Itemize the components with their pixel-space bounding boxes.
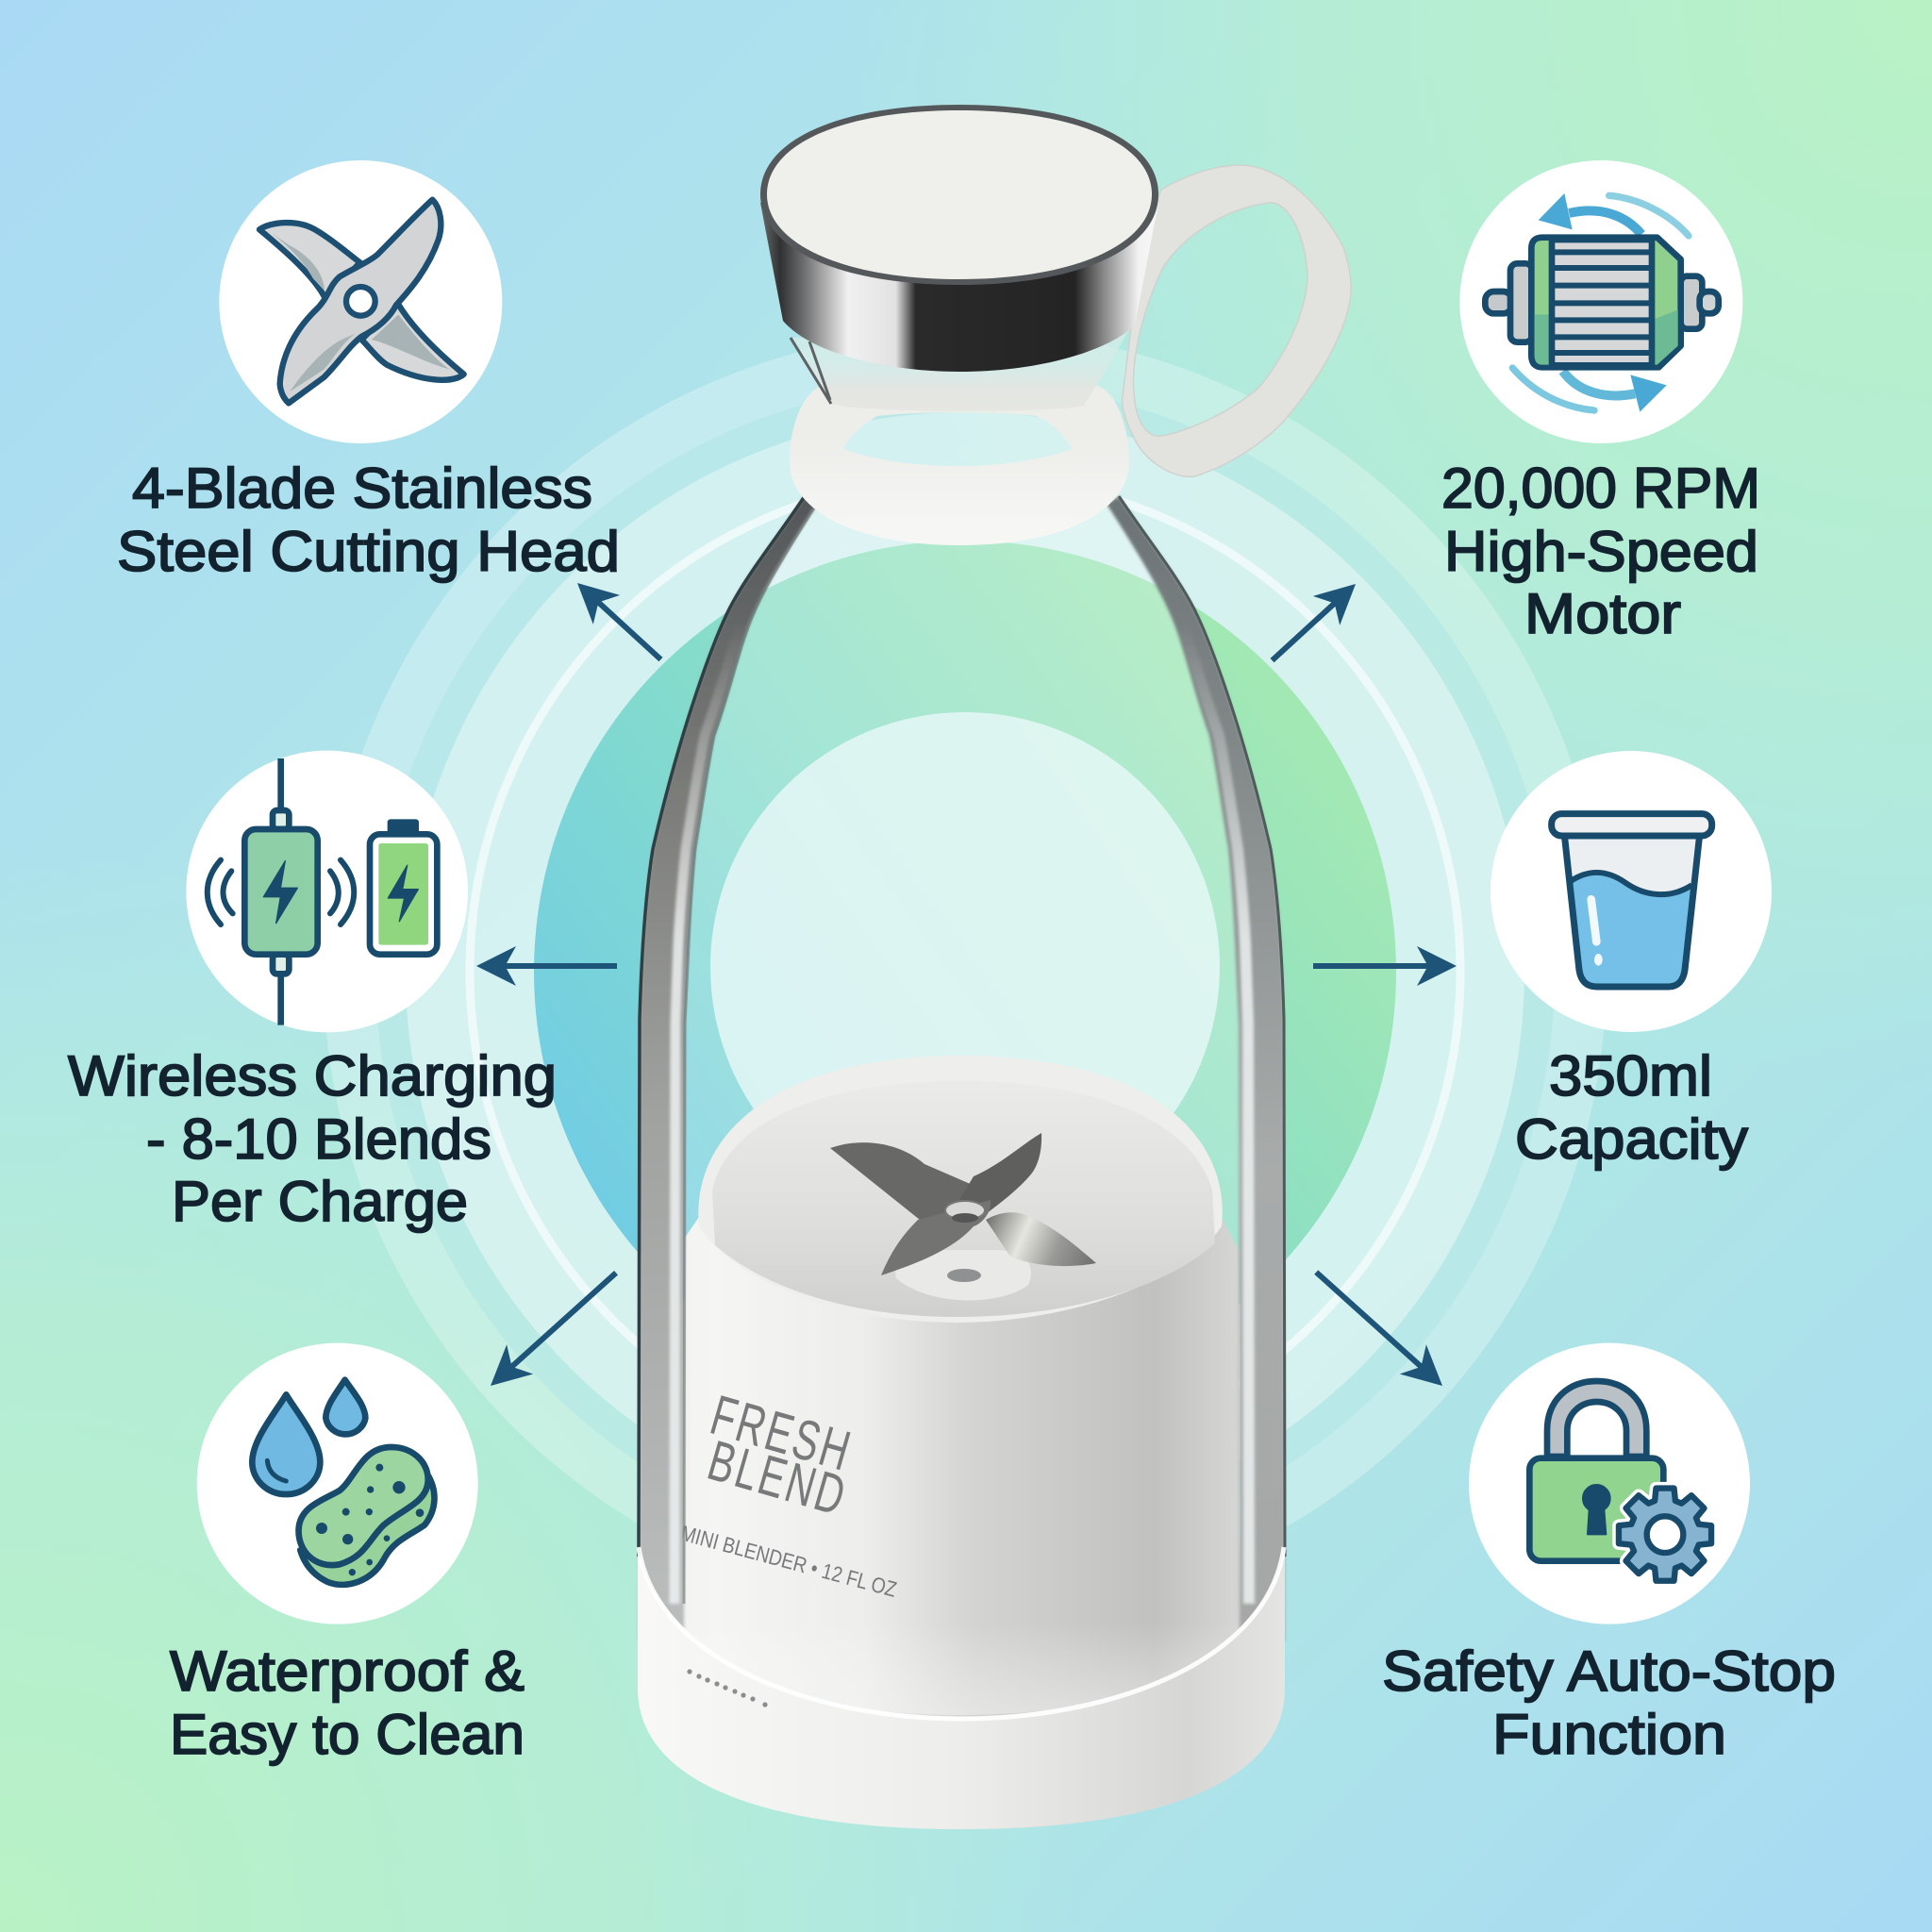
neck glass left reflection xyxy=(791,338,831,404)
icon circle: motor xyxy=(1459,160,1742,443)
icon: 4-blade cross xyxy=(259,200,464,403)
concentric rings behind bottle xyxy=(324,330,1607,1613)
neck glass xyxy=(791,330,1129,411)
label: wireless charging: Per Charge xyxy=(172,1170,468,1233)
label: capacity: 350ml xyxy=(1549,1044,1712,1108)
brand text: BLEND xyxy=(701,1428,855,1528)
metal band xyxy=(760,203,1158,372)
label: motor: Motor xyxy=(1524,582,1681,645)
label: wireless charging xyxy=(68,1044,557,1233)
label: wireless charging: - 8-10 Blends xyxy=(146,1108,491,1171)
icon: rotation arrows xyxy=(1512,193,1689,412)
icon: charger xyxy=(208,758,354,1025)
brand text xyxy=(701,1383,859,1528)
icon circle: wireless charging xyxy=(186,751,468,1032)
label: capacity: Capacity xyxy=(1515,1108,1748,1171)
icon: water drops xyxy=(252,1380,365,1494)
arrow: right xyxy=(1313,946,1457,986)
arrow: lower right xyxy=(1303,1257,1456,1401)
label: waterproof: Easy to Clean xyxy=(170,1703,525,1766)
arrow: upper right xyxy=(1258,570,1369,675)
handle loop xyxy=(1123,165,1351,476)
cup recess xyxy=(712,1081,1215,1317)
blender base xyxy=(638,1547,1285,1829)
cup rim xyxy=(698,1056,1223,1323)
icon: sponge xyxy=(299,1447,434,1585)
brand text: FRESH xyxy=(704,1383,859,1483)
blade assembly xyxy=(830,1133,1096,1300)
label: blade: Steel Cutting Head xyxy=(117,520,620,583)
glass bottom seam xyxy=(639,1547,1284,1719)
left glass edge xyxy=(639,496,817,1641)
cap top xyxy=(760,105,1158,285)
arrow: upper left xyxy=(564,569,675,675)
model text: MINI BLENDER • 12 FL OZ xyxy=(678,1521,899,1602)
blade housing cup xyxy=(651,1056,1273,1715)
icon circle: water and sponge xyxy=(197,1343,478,1624)
charging dots xyxy=(687,1669,768,1707)
label: safety: Function xyxy=(1492,1703,1726,1766)
label: safety xyxy=(1382,1640,1836,1766)
icon: sponge pores xyxy=(316,1464,424,1575)
label: wireless charging: Wireless Charging xyxy=(68,1044,557,1108)
glass body tint xyxy=(639,496,1285,1717)
icon circle: padlock with gear xyxy=(1469,1343,1750,1624)
icon: motor body xyxy=(1485,238,1719,367)
icon circle: cup xyxy=(1491,751,1772,1032)
arrow: left xyxy=(476,946,617,986)
label: blade: 4-Blade Stainless xyxy=(132,457,592,520)
label: waterproof: Waterproof & xyxy=(170,1640,525,1703)
glass lower fill xyxy=(683,1563,1240,1717)
label: safety: Safety Auto-Stop xyxy=(1382,1640,1836,1703)
silicone neck ring xyxy=(790,385,1129,545)
icon circle: blade xyxy=(219,160,502,443)
icon: gear xyxy=(1619,1489,1711,1581)
label: capacity xyxy=(1515,1044,1748,1171)
label: motor xyxy=(1441,457,1760,645)
icon: padlock xyxy=(1529,1381,1663,1561)
icon: battery xyxy=(370,819,437,955)
label: motor: 20,000 RPM xyxy=(1441,457,1760,520)
bottle cap xyxy=(760,105,1158,372)
right glass edge xyxy=(1107,496,1285,1641)
arrow: lower left xyxy=(477,1258,629,1401)
label: waterproof xyxy=(170,1640,525,1766)
icon: measuring cup xyxy=(1552,814,1712,987)
icon: motor fins xyxy=(1552,252,1652,353)
label: motor: High-Speed xyxy=(1444,520,1758,583)
label: blade xyxy=(117,457,620,583)
